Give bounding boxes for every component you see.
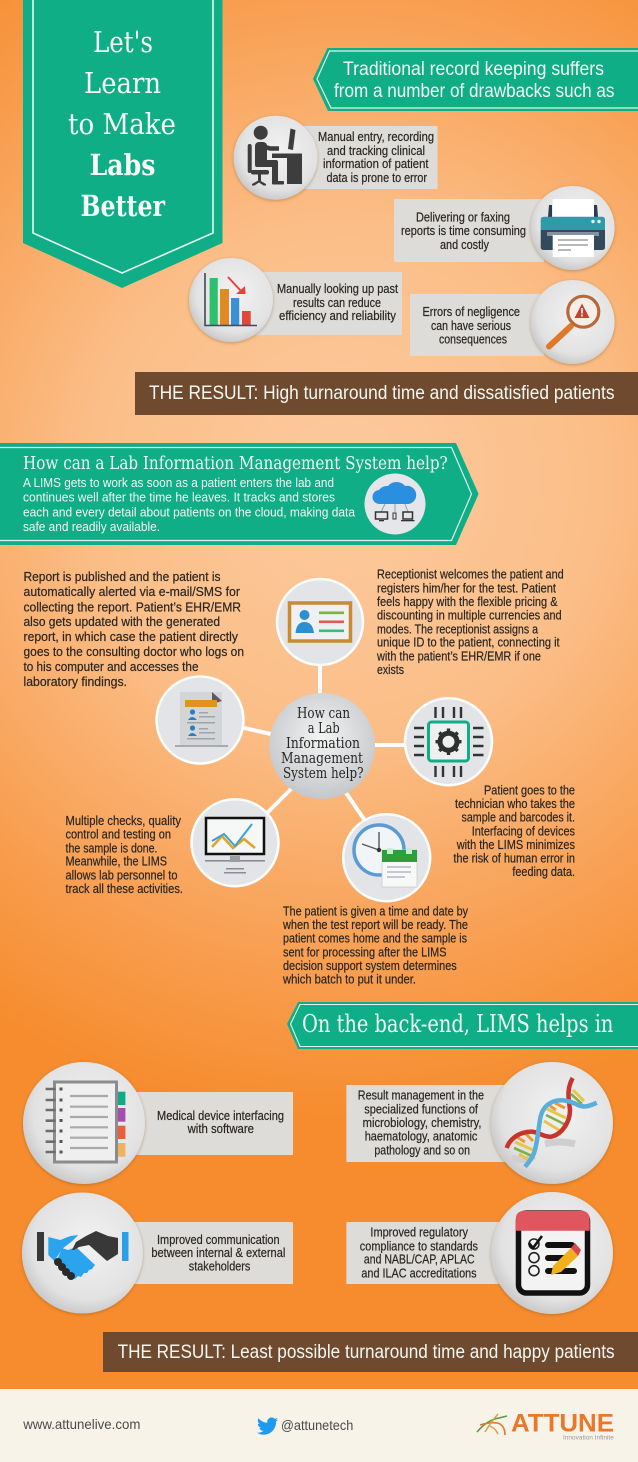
logo: Attune: ATTUNE [511,1410,614,1438]
icon: cloud network [364,474,426,534]
text: LIMS intro: safe and readily available. [23,519,160,534]
text: report published: report, in which case the patient directly [24,630,239,644]
text: report published: Report is published and the patient is [24,570,220,584]
drawback: manual entry [234,116,438,200]
icon: clock and calendar [354,825,417,887]
icon: patient report [175,692,228,747]
text: report published: collecting the report. Patient’s EHR/EMR [24,600,241,614]
text: LIMS intro [23,475,356,534]
heading: drawbacks: Traditional record keeping suffers [343,58,604,80]
text: delivering reports [401,210,526,252]
text: regulatory compliance: and ILAC accreditations [361,1266,477,1280]
text: technician: with the LIMS minimizes [456,838,575,852]
text: manual entry: information of patient [323,157,429,171]
drawback: errors of negligence [410,280,615,364]
text: quality checks: the sample is done. [66,841,158,855]
text: test time and date: when the test report will be ready. The [282,918,468,932]
icon: chip with gear [414,707,484,777]
text: manual entry [318,130,434,185]
text: manual lookup [277,282,398,323]
hub: center question: System help? [283,766,364,782]
text: delivering reports: Delivering or faxing [416,210,510,224]
heading: how LIMS helps: How can a Lab Information Management System help? [23,454,448,474]
text: result management: microbiology, chemistry, [363,1116,482,1130]
text: report published [24,570,244,689]
website: www.attunelive.com [22,1416,140,1432]
text: receptionist: exists [377,663,404,677]
text: receptionist [376,568,564,677]
text: manual lookup: Manually looking up past [277,282,398,296]
text: technician [453,783,575,879]
step: clock and calendar [343,814,430,901]
title banner: Better [80,189,166,223]
text: receptionist: with the patient’s EHR/EMR if one [376,649,541,663]
text: manual entry: Manual entry, recording [318,130,434,144]
text: regulatory compliance: compliance to standards [360,1239,478,1253]
text: regulatory compliance [360,1226,478,1280]
text: receptionist: modes. The receptionist assigns a [377,622,538,636]
hub connectors [240,662,408,822]
icon: monitor with chart [205,818,265,874]
text: report published: automatically alerted via e-mail/SMS for [24,585,240,599]
text: communication: Improved communication [157,1233,280,1247]
text: LIMS intro: each and every detail about patients on the cloud, making data [23,505,356,520]
text: technician: Interfacing of devices [472,824,575,838]
title banner [23,0,222,288]
hub: center question: Information [286,736,360,752]
benefit: result management [346,1062,613,1184]
text: report published: laboratory findings. [24,675,127,689]
icon: notebook [46,1082,125,1162]
icon: printer [541,199,605,257]
drawback: manual lookup [189,258,402,342]
text: report published: goes to the consulting doctor who logs on [24,645,244,659]
icon: person at desk [248,126,302,186]
text: device interfacing: Medical device interfacing [157,1109,284,1123]
step: quality monitor [192,799,278,886]
step: sample chip [405,698,492,785]
title banner: Labs [90,148,156,182]
text: receptionist: Receptionist welcomes the patient and [377,568,564,582]
icon: checklist [516,1211,590,1293]
hub: center question [269,693,375,799]
hub: center question: Management [281,751,363,767]
benefit: communication [22,1192,293,1314]
text: technician: feeding data. [512,865,575,879]
icon: twitter bird [257,1417,278,1435]
text: test time and date: decision support system determines [283,959,457,973]
text: test time and date [282,904,469,987]
benefit: device interfacing [23,1062,293,1184]
text: LIMS intro: A LIMS gets to work as soon as a patient enters the lab and [23,475,334,490]
text: technician: the risk of human error in [453,852,575,866]
logo: Attune: Innovation Infinite [563,1434,614,1442]
text: quality checks [66,814,183,896]
heading: drawbacks [313,48,638,111]
text: report published: to his computer and accesses the [24,660,199,674]
text: errors of negligence: can have serious [431,319,511,333]
text: quality checks: allows lab personnel to [66,868,178,882]
title banner: to Make [68,107,176,141]
text: manual entry: data is prone to error [326,171,427,185]
text: quality checks: control and testing on [66,828,171,842]
text: quality checks: track all these activities. [66,882,183,896]
text: communication [151,1233,285,1274]
text: test time and date: sent for processing after the LIMS [283,945,446,959]
logo: Attune [477,1410,614,1442]
text: technician: technician who takes the [455,797,575,811]
icon: handshake [37,1231,128,1280]
text: device interfacing [157,1109,284,1136]
footer [0,1389,638,1462]
text: quality checks: Meanwhile, the LIMS [66,855,167,869]
text: manual lookup: results can reduce [293,296,381,310]
result bar: least turnaround [103,1332,638,1372]
text: result management: specialized functions of [364,1102,478,1116]
text: regulatory compliance: and NABL/CAP, APLAC [364,1253,475,1267]
text: receptionist: feels happy with the flexible pricing & [377,595,558,609]
text: receptionist: unique ID to the patient, connecting it [377,636,560,650]
text: result management [358,1089,484,1157]
twitter handle: @attunetech [281,1417,353,1433]
title banner: Learn [84,66,161,100]
drawback: delivering reports [394,186,615,270]
text: communication: stakeholders [189,1260,250,1274]
text: technician: sample and barcodes it. [462,811,575,825]
text: technician: Patient goes to the [484,783,575,797]
text: errors of negligence: Errors of negligence [422,305,520,319]
text: manual lookup: efficiency and reliability [279,309,397,323]
text: communication: between internal & external [151,1246,285,1260]
text: delivering reports: reports is time consuming [401,224,526,238]
step: published report [156,676,244,764]
text: regulatory compliance: Improved regulatory [370,1226,469,1240]
text: errors of negligence [422,305,520,346]
text: report published: also gets updated with the generated [24,615,220,629]
hub: center question: How can [297,706,350,722]
text: result management: pathology and so on [374,1143,470,1157]
text: result management: Result management in the [358,1089,484,1103]
icon: DNA helix [507,1078,597,1167]
text: receptionist: discounting in multiple currencies and [377,609,562,623]
icon: declining bar chart [205,273,257,326]
title banner: Let's [93,25,153,59]
text: manual entry: and tracking clinical [327,144,425,158]
icon: magnifier with warning [549,296,599,346]
text: test time and date: The patient is given a time and date by [283,904,469,918]
text: test time and date: which batch to put it under. [282,973,416,987]
text: quality checks: Multiple checks, quality [66,814,182,828]
text: errors of negligence: consequences [439,332,507,346]
text: test time and date: patient comes home and the sample is [283,932,467,946]
panel: how LIMS helps [0,443,479,545]
result bar: high turnaround [135,372,638,415]
step: receptionist card [277,579,363,665]
icon: ID card [290,603,350,641]
text: delivering reports: and costly [440,238,490,252]
text: result management: haematology, anatomic [365,1130,477,1144]
text: device interfacing: with software [187,1122,254,1136]
text: LIMS intro: continues well after the time he leaves. It tracks and stores [23,490,335,505]
text: receptionist: registers him/her for the test. Patient [377,581,556,595]
benefit: regulatory compliance [346,1192,613,1314]
hub: center question: a Lab [308,721,340,737]
heading: back-end [287,1002,638,1049]
